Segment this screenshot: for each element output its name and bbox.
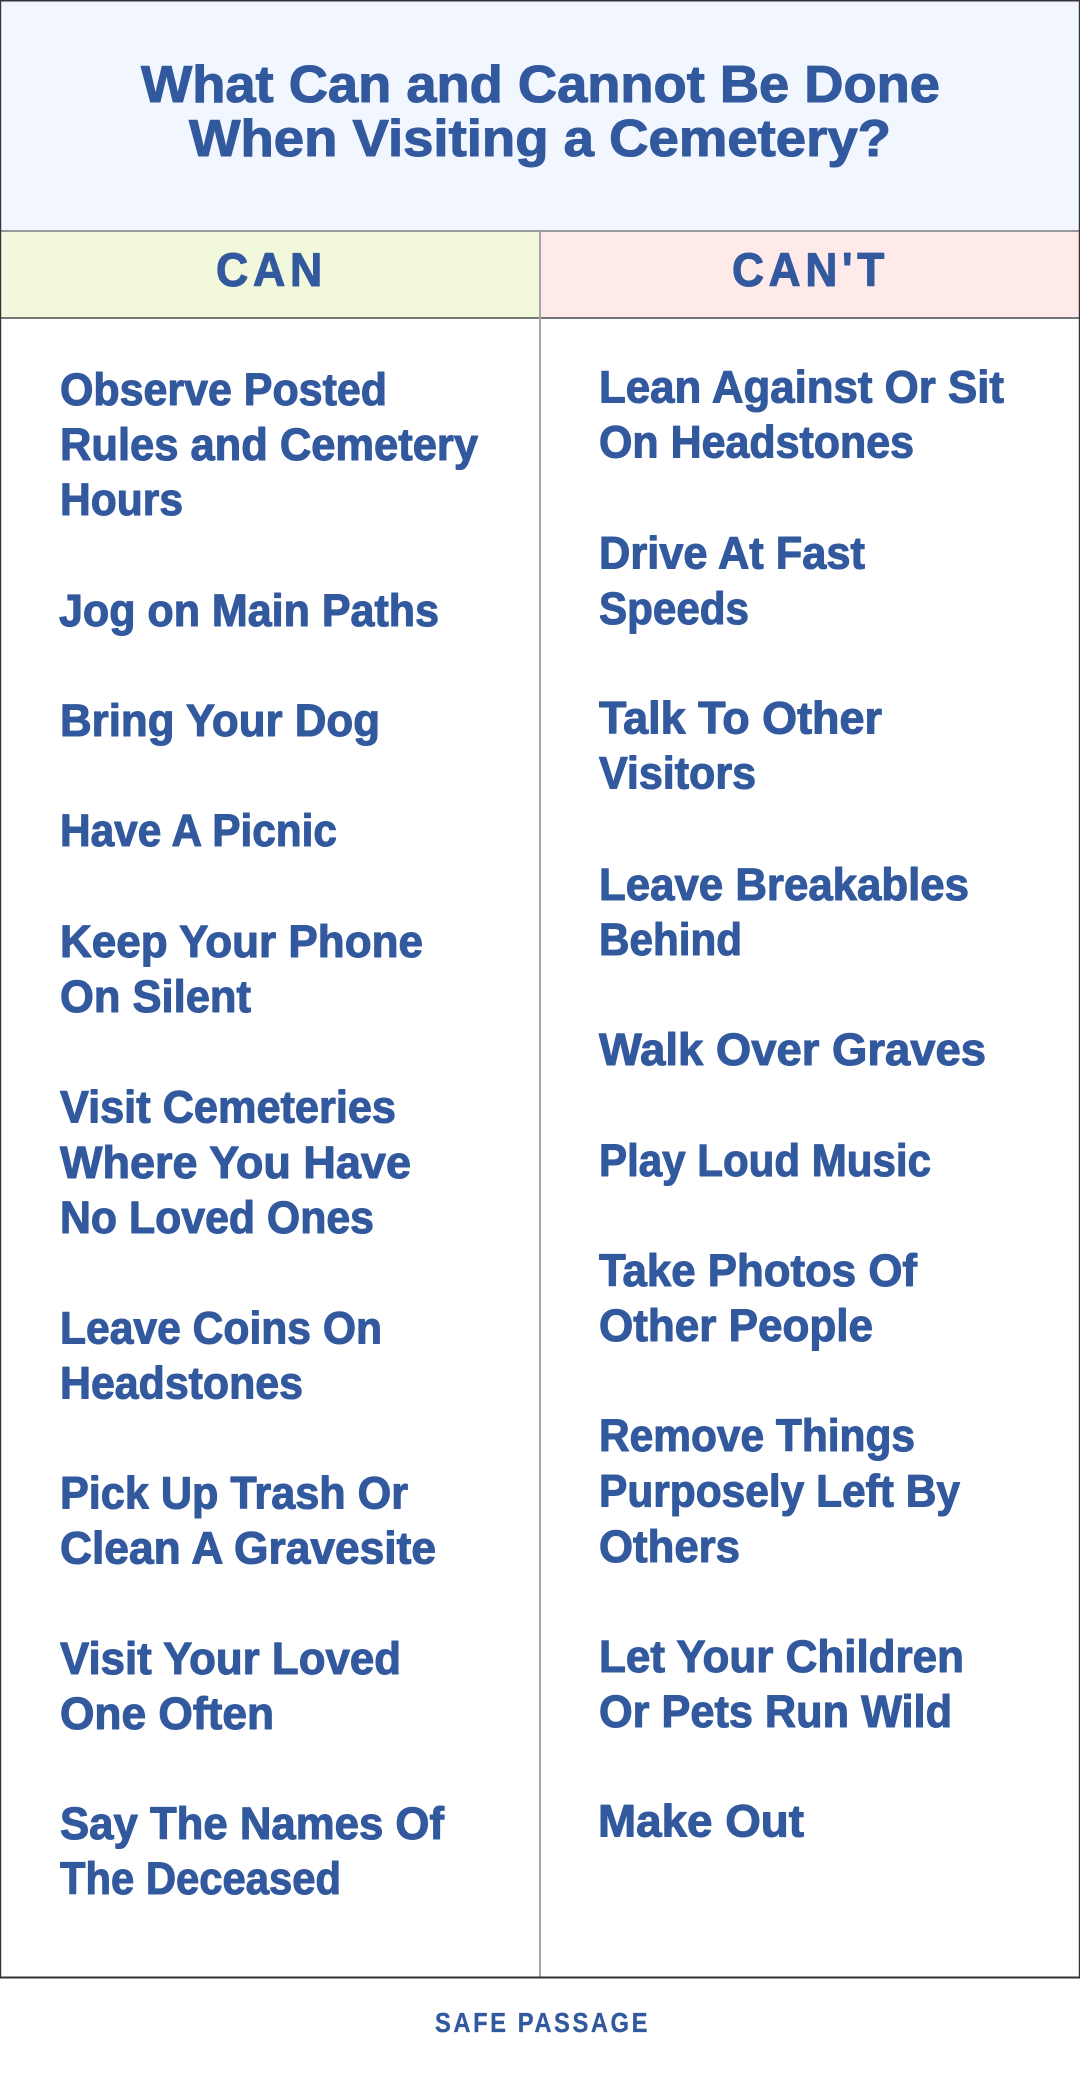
panel: cant list: [598, 362, 1004, 1847]
item: visit cemeteries: No Loved Ones: [60, 1192, 374, 1243]
item: make out: Make Out: [598, 1796, 804, 1846]
item: drive at fast speeds: Drive At Fast: [599, 528, 865, 579]
item: pick up trash: [60, 1468, 436, 1574]
item: visit your loved one: [60, 1633, 401, 1739]
panel: can list: [59, 364, 478, 1904]
item: visit cemeteries: Visit Cemeteries: [60, 1082, 396, 1132]
item: lean against: [599, 362, 1004, 468]
item: observe posted rules: [60, 364, 478, 525]
item: play loud music: Play Loud Music: [599, 1135, 931, 1186]
item: keep your phone on silent: On Silent: [60, 971, 251, 1022]
item: leave coins: Headstones: [60, 1358, 303, 1408]
item: observe posted rules: Rules and Cemetery: [60, 419, 478, 470]
item: leave breakables: Behind: [599, 914, 742, 965]
item: lean against: Lean Against Or Sit: [599, 362, 1004, 413]
item: talk to other visitors: Visitors: [599, 748, 756, 798]
item: say the names: [60, 1798, 445, 1904]
item: let your children: Let Your Children: [599, 1631, 964, 1682]
item: visit cemeteries: [60, 1082, 411, 1243]
title: [141, 56, 940, 168]
item: talk to other visitors: [599, 692, 882, 798]
item: visit your loved one: Visit Your Loved: [60, 1633, 401, 1684]
item: leave coins: Leave Coins On: [60, 1302, 382, 1354]
item: bring your dog: Bring Your Dog: [60, 695, 380, 746]
item: observe posted rules: Hours: [60, 474, 183, 525]
panel: CAN header: [0, 231, 540, 318]
item: say the names: Say The Names Of: [60, 1798, 445, 1849]
item: take photos: Other People: [599, 1300, 873, 1351]
footer brand: SAFE PASSAGE: [435, 2007, 650, 2038]
item: remove things: Remove Things: [599, 1410, 915, 1461]
item: say the names: The Deceased: [60, 1853, 341, 1904]
item: remove things: [599, 1410, 960, 1572]
panel: CAN header: CAN: [216, 243, 327, 296]
item: drive at fast speeds: [599, 528, 865, 634]
item: leave breakables: Leave Breakables: [599, 859, 969, 910]
item: observe posted rules: Observe Posted: [60, 364, 387, 415]
item: drive at fast speeds: Speeds: [599, 583, 749, 634]
panel: CAN'T header: [540, 231, 1080, 318]
title: When Visiting a Cemetery?: [189, 110, 891, 168]
item: have a picnic: Have A Picnic: [60, 805, 337, 856]
item: let your children: [599, 1631, 964, 1737]
item: pick up trash: Clean A Gravesite: [60, 1522, 436, 1574]
item: let your children: Or Pets Run Wild: [599, 1686, 952, 1737]
item: remove things: Purposely Left By: [599, 1466, 960, 1516]
item: keep your phone on silent: [60, 916, 423, 1022]
item: lean against: On Headstones: [599, 417, 914, 468]
item: jog on main paths: Jog on Main Paths: [59, 585, 439, 636]
item: keep your phone on silent: Keep Your Phone: [60, 916, 423, 967]
title: What Can and Cannot Be Done: [141, 56, 940, 114]
panel: CAN'T header: CAN'T: [732, 243, 889, 296]
panel: title band: [0, 0, 1080, 231]
item: take photos: [599, 1245, 918, 1351]
item: visit your loved one: One Often: [60, 1688, 274, 1739]
item: remove things: Others: [599, 1521, 740, 1572]
item: leave breakables: [599, 859, 969, 965]
item: visit cemeteries: Where You Have: [60, 1137, 411, 1188]
item: leave coins: [60, 1302, 382, 1408]
item: talk to other visitors: Talk To Other: [599, 692, 882, 744]
item: take photos: Take Photos Of: [599, 1245, 918, 1296]
item: walk over graves: Walk Over Graves: [599, 1024, 986, 1075]
item: pick up trash: Pick Up Trash Or: [60, 1468, 408, 1518]
